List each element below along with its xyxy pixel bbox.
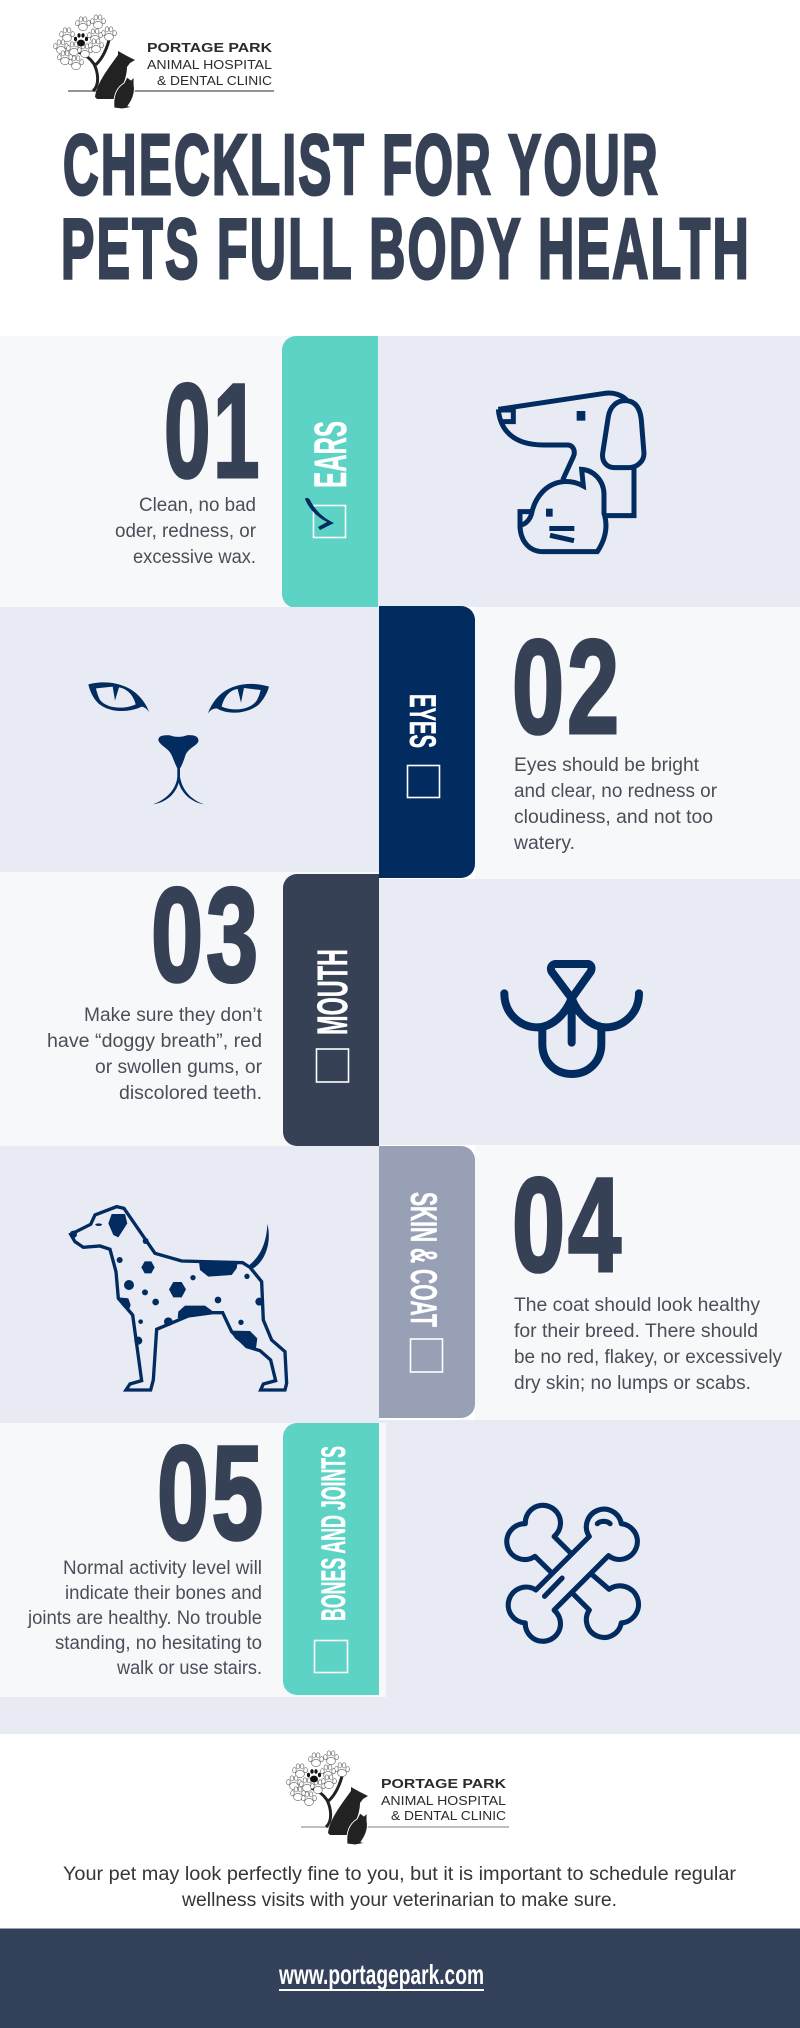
text: coat description: for their breed. There should <box>514 1321 758 1342</box>
text: bones description: walk or use stairs. <box>116 1658 262 1679</box>
logo text: PORTAGE PARK <box>147 40 273 55</box>
logo text <box>381 1776 507 1823</box>
logo: Portage Park footer <box>287 1751 509 1845</box>
icon: dog mouth and tongue <box>504 964 639 1074</box>
logo text: ANIMAL HOSPITAL <box>147 57 272 72</box>
tab: bones and joints: BONES AND JOINTS <box>315 1446 353 1621</box>
logo: Portage Park header <box>54 15 274 109</box>
text: mouth description: have “doggy breath”, red <box>47 1031 262 1052</box>
icon: dog and cat silhouette <box>328 1787 368 1845</box>
tab: ears <box>282 336 378 608</box>
text: ears description: Clean, no bad <box>139 495 256 516</box>
number 04: 04 <box>512 1151 624 1300</box>
tab: skin and coat <box>379 1146 475 1418</box>
logo text: PORTAGE PARK <box>381 1776 507 1791</box>
logo text: ANIMAL HOSPITAL <box>381 1793 506 1808</box>
icon: dalmatian <box>70 1207 287 1390</box>
text: mouth description: Make sure they don’t <box>84 1005 263 1026</box>
text: closing message: Your pet may look perfectly fine to you, but it is important to schedule regular <box>63 1864 737 1885</box>
tab: eyes <box>379 606 475 878</box>
footer band <box>0 1928 800 2028</box>
text: mouth description: discolored teeth. <box>119 1083 262 1104</box>
text: eyes description <box>513 755 718 854</box>
tab: skin and coat: SKIN & COAT <box>403 1192 444 1327</box>
text: eyes description: and clear, no redness or <box>514 781 718 802</box>
panel: 05 bones and joints <box>0 1419 800 1734</box>
text: bones description: joints are healthy. No trouble <box>27 1608 262 1629</box>
number 02: 02 <box>512 613 622 762</box>
icon: crossed bones <box>507 1505 639 1641</box>
logo text: & DENTAL CLINIC <box>391 1808 506 1823</box>
panel: 04 skin and coat <box>0 1145 800 1423</box>
text: mouth description: or swollen gums, or <box>95 1057 263 1078</box>
icon: dog and cat heads <box>498 393 644 552</box>
text: ears description: excessive wax. <box>133 547 256 568</box>
text: ears description: oder, redness, or <box>115 521 257 542</box>
panel: 03 mouth <box>0 861 800 1146</box>
panel: 02 eyes <box>0 606 800 879</box>
text: mouth description <box>47 1005 263 1104</box>
tab: mouth: MOUTH <box>309 949 357 1035</box>
icon: dog and cat silhouette <box>95 51 135 109</box>
icon: paw tree <box>54 15 116 91</box>
text: eyes description: cloudiness, and not too <box>514 807 713 828</box>
logo text: & DENTAL CLINIC <box>157 73 272 88</box>
number 01: 01 <box>164 357 262 506</box>
text: ears description <box>115 495 257 568</box>
icon: paw tree <box>287 1751 349 1827</box>
website link: www.portagepark.com <box>278 1959 484 1990</box>
tab: eyes: EYES <box>402 694 443 748</box>
logo text <box>147 40 273 88</box>
text: closing message: wellness visits with your veterinarian to make sure. <box>181 1890 617 1911</box>
text: coat description: be no red, flakey, or excessively <box>514 1347 782 1368</box>
tab: mouth <box>283 874 379 1146</box>
tab: ears: EARS <box>305 421 356 488</box>
text: bones description: Normal activity level will <box>63 1558 262 1579</box>
text: coat description: dry skin; no lumps or scabs. <box>514 1373 751 1394</box>
text: bones description: standing, no hesitating to <box>55 1633 262 1654</box>
text: closing message <box>63 1864 737 1911</box>
tab: bones and joints <box>283 1423 379 1695</box>
icon: cat face <box>88 682 269 804</box>
icon: check mark <box>305 498 334 530</box>
text: bones description: indicate their bones and <box>65 1583 262 1604</box>
number 05: 05 <box>157 1419 266 1568</box>
number 03: 03 <box>151 861 261 1010</box>
text: coat description <box>514 1295 782 1394</box>
text: bones description <box>27 1558 262 1679</box>
text: eyes description: watery. <box>513 833 575 854</box>
text: coat description: The coat should look healthy <box>514 1295 760 1316</box>
panel: 01 ears <box>0 336 800 608</box>
title <box>61 118 751 297</box>
text: eyes description: Eyes should be bright <box>514 755 700 776</box>
